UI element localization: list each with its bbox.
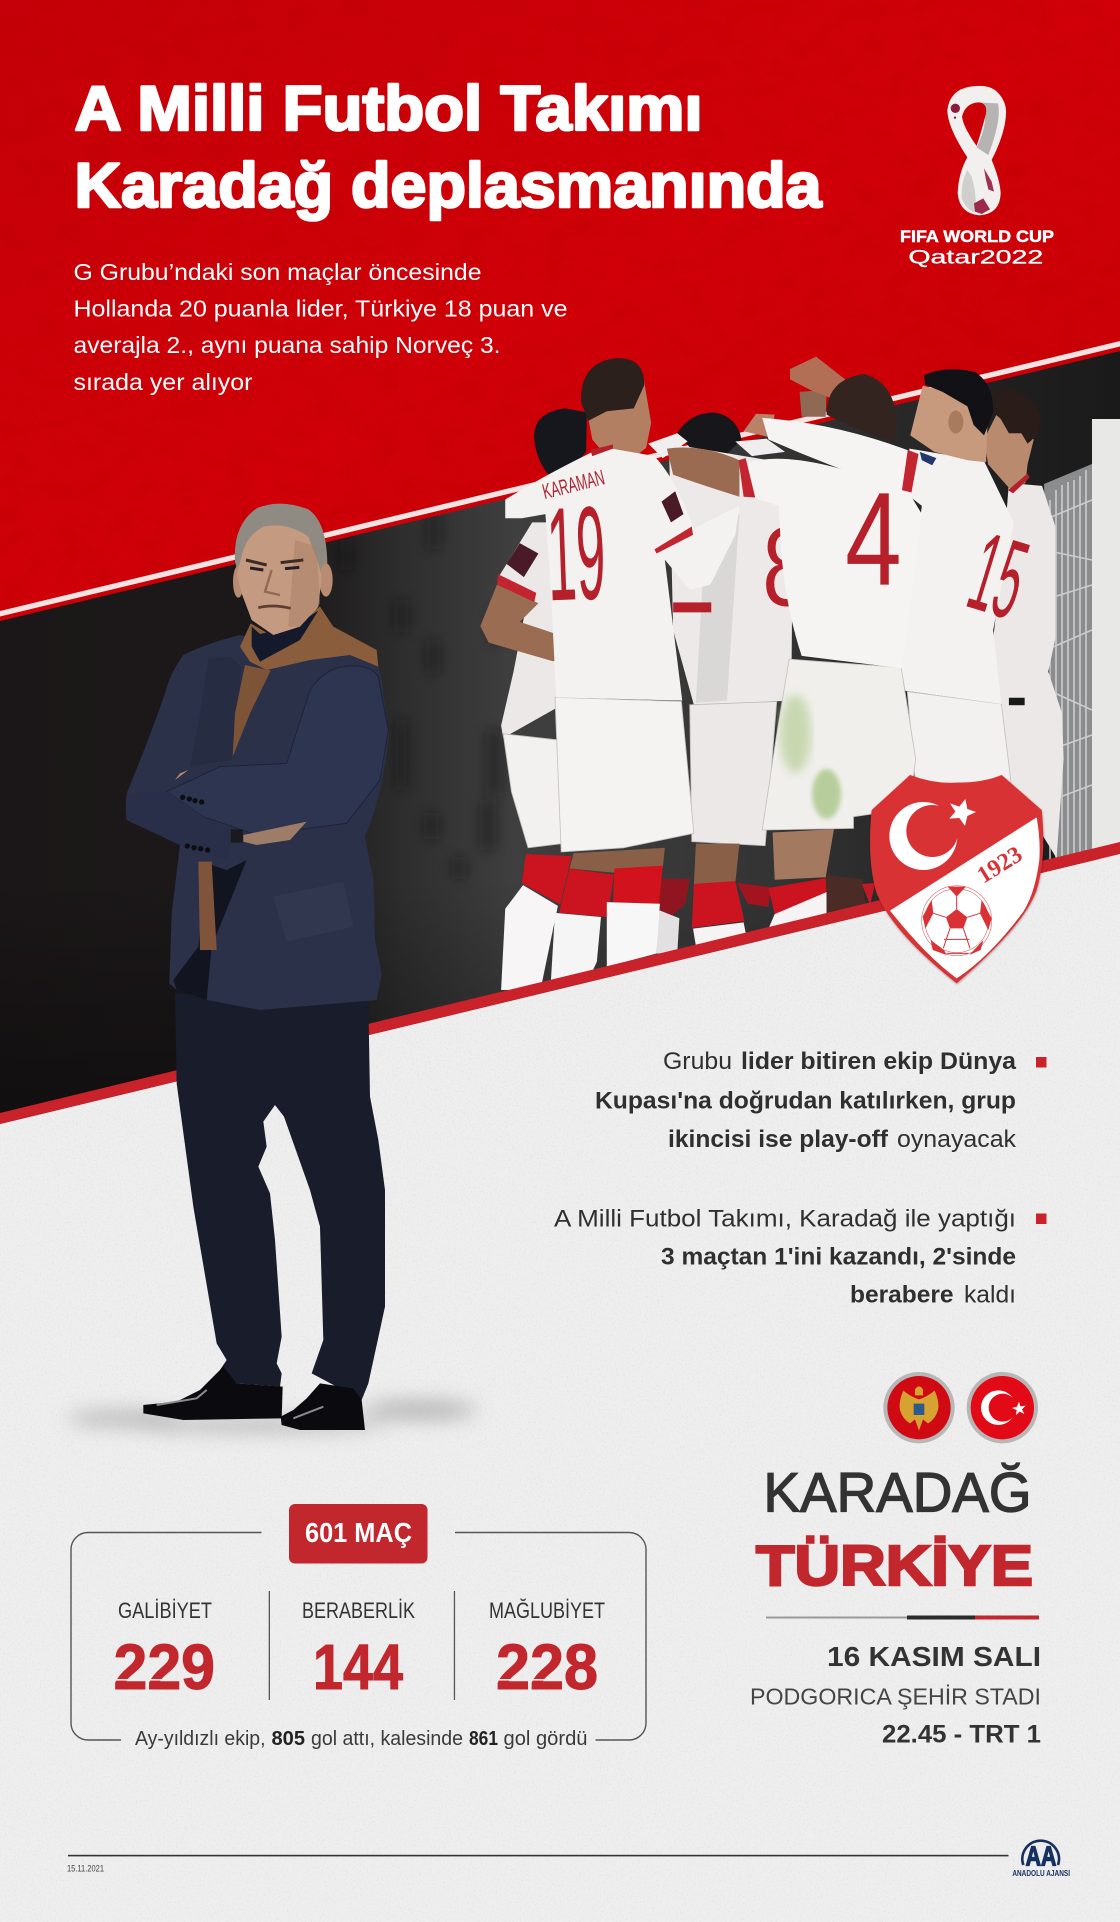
player number 19: 19 [545, 479, 608, 629]
icon: Turkish Football Federation shield: 1923 [973, 842, 1027, 889]
note: goals scored and conceded [135, 1728, 588, 1750]
stat: wins [113, 1598, 215, 1703]
icon: FIFA World Cup Qatar 2022 logo [900, 86, 1054, 268]
text block: group format: Grubu [663, 1048, 732, 1075]
note: goals scored and conceded: 861 [469, 1728, 498, 1750]
panel: light paper background [0, 842, 1120, 1922]
player number 15 [901, 369, 1040, 786]
text block: match details: 22.45 - TRT 1 [882, 1720, 1041, 1748]
panel: dark stadium photo band [0, 330, 1120, 1130]
turtleneck [252, 611, 318, 662]
player far left [480, 408, 587, 990]
text block: match details: PODGORICA ŞEHİR STADI [750, 1684, 1041, 1710]
match title: Karadağ vs Türkiye [756, 1460, 1033, 1598]
player number 15: 15 [956, 509, 1040, 643]
player number 4: 4 [845, 466, 902, 614]
photo: Turkish players celebrating [480, 357, 1064, 990]
badge: total matches [289, 1504, 428, 1564]
title: A Milli Futbol Takımı [74, 74, 702, 144]
note: goals scored and conceded: gol attı, kalesinde [311, 1728, 463, 1750]
player number 4 [667, 357, 922, 929]
icon: FIFA World Cup Qatar 2022 logo: Qatar2022 [908, 247, 1043, 268]
intro paragraph: sırada yer alıyor [74, 369, 253, 395]
lapel and shading [190, 657, 242, 767]
text block: match details: 16 KASIM SALI [827, 1641, 1041, 1672]
intro paragraph: G Grubu’ndaki son maçlar öncesinde [74, 259, 481, 285]
note: goals scored and conceded: gol gördü [504, 1728, 588, 1750]
title: Karadağ deplasmanında [74, 151, 822, 221]
footer: rule and date: 15.11.2021 [67, 1864, 104, 1874]
jacket [126, 635, 389, 1010]
stat: losses [489, 1598, 605, 1703]
intro paragraph: Hollanda 20 puanla lider, Türkiye 18 puan ve [74, 296, 568, 322]
icon: Turkish Football Federation shield [870, 775, 1043, 983]
player middle [657, 413, 875, 954]
text block: head to head with Montenegro: kaldı [964, 1282, 1016, 1308]
text block: group format: Kupası'na doğrudan katılırken, grup [595, 1088, 1016, 1114]
text block: head to head with Montenegro: berabere [850, 1282, 954, 1308]
badge: total matches: 601 MAÇ [305, 1517, 412, 1548]
divider: tricolour rule [766, 1616, 1039, 1620]
text block: head to head with Montenegro: 3 maçtan 1'ini kazandı, 2'sinde [661, 1244, 1016, 1270]
player middle: 8 [762, 504, 812, 629]
text block: match details [750, 1641, 1041, 1748]
player far right [984, 389, 1064, 858]
panel: goal post and net [1044, 419, 1120, 860]
text block: group format: ikincisi ise play-off [668, 1126, 889, 1153]
stat: losses: 228 [496, 1631, 598, 1703]
player number 19: KARAMAN [540, 465, 607, 504]
icon: Anadolu Ajansı logo [1012, 1841, 1070, 1878]
text block: group format: oynayacak [897, 1126, 1017, 1153]
head [233, 504, 333, 635]
icon: flags of Montenegro and Turkey [883, 1372, 1038, 1443]
stat: wins: GALİBİYET [118, 1598, 212, 1623]
shoes [143, 1367, 365, 1430]
icon: Anadolu Ajansı logo: AA [1026, 1841, 1056, 1872]
stat: draws [302, 1598, 415, 1703]
match title: Karadağ vs Türkiye: KARADAĞ [764, 1460, 1032, 1524]
icon: FIFA World Cup Qatar 2022 logo: FIFA WORLD CUP [900, 227, 1054, 246]
stat: draws: BERABERLİK [302, 1598, 415, 1623]
text block: head to head with Montenegro: A Milli Futbol Takımı, Karadağ ile yaptığı [554, 1206, 1016, 1232]
stat: wins: 229 [114, 1631, 215, 1703]
intro paragraph [74, 259, 568, 395]
panel: red header background [0, 0, 1120, 630]
stat: losses: MAĞLUBİYET [489, 1598, 605, 1623]
text block: group format [595, 1048, 1046, 1153]
scarf [240, 607, 378, 670]
intro paragraph: averajla 2., aynı puana sahip Norveç 3. [74, 332, 500, 358]
player 15 sleeve across the group [735, 418, 919, 493]
title [74, 74, 822, 221]
note: goals scored and conceded: 805 [272, 1728, 305, 1750]
text block: head to head with Montenegro [554, 1206, 1046, 1308]
stat: draws: 144 [313, 1631, 403, 1703]
crossed arms [167, 666, 388, 835]
trousers [175, 993, 385, 1400]
photo: coach Stefan Kuntz [67, 504, 477, 1431]
match title: Karadağ vs Türkiye: TÜRKİYE [756, 1534, 1033, 1598]
text block: group format: lider bitiren ekip Dünya [741, 1048, 1017, 1075]
note: goals scored and conceded: Ay-yıldızlı ekip, [135, 1728, 266, 1750]
player number 19 [505, 358, 739, 982]
icon: Anadolu Ajansı logo: ANADOLU AJANSI [1012, 1869, 1070, 1878]
ground shadow [67, 1401, 477, 1431]
panel: all-time record [71, 1504, 646, 1750]
